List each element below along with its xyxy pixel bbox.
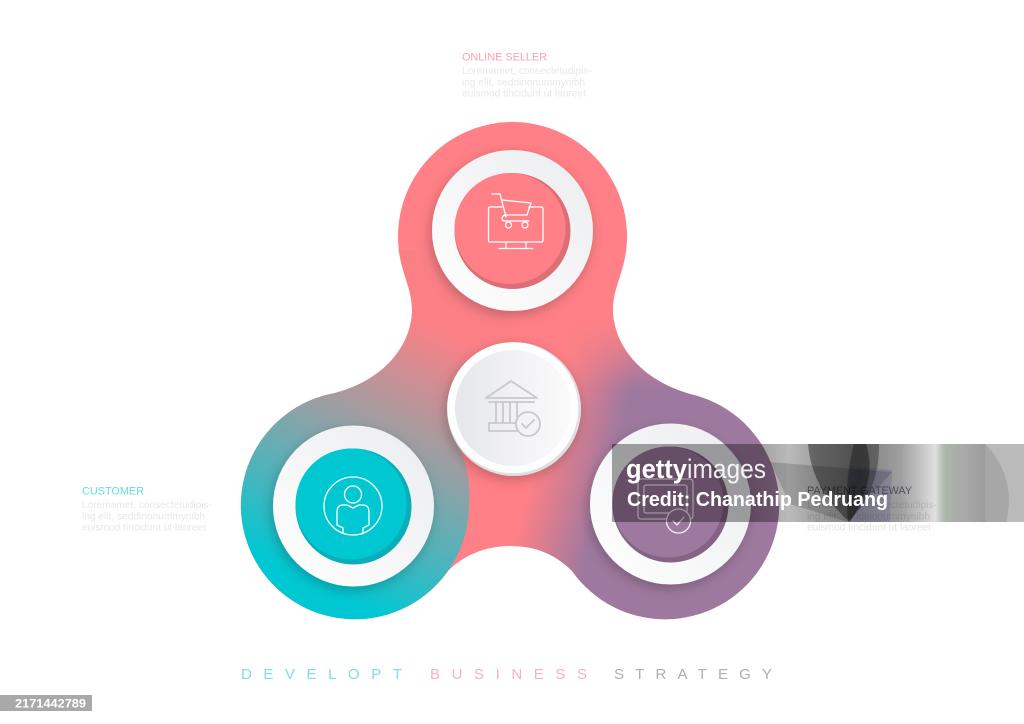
label: customer bbox=[82, 486, 212, 534]
inner disc bbox=[455, 350, 571, 466]
inner disc bbox=[454, 173, 570, 289]
image id badge: 2171442789 bbox=[15, 696, 86, 710]
node: payment gateway bbox=[590, 424, 751, 584]
watermark petals bbox=[770, 444, 892, 522]
watermark arc bbox=[985, 444, 1009, 522]
body text: Loremamet, consectetudipis- bbox=[82, 500, 212, 511]
label: online seller bbox=[462, 52, 592, 100]
watermark logo text: getty bbox=[626, 454, 687, 484]
node: center bank bbox=[447, 342, 581, 476]
label: online seller: ONLINE SELLER bbox=[462, 52, 547, 64]
inner disc bbox=[296, 448, 412, 564]
watermark band bbox=[612, 444, 1024, 522]
title bbox=[241, 666, 772, 683]
outer white disc bbox=[447, 342, 581, 476]
body text bbox=[807, 500, 937, 534]
icon: shopping cart on monitor bbox=[488, 194, 543, 248]
body text: ing elit, seddinonummynibh bbox=[807, 512, 930, 522]
body text: euismod tincidunt ut laoreet bbox=[462, 88, 586, 100]
white ring bbox=[590, 424, 751, 584]
node: online seller bbox=[432, 150, 593, 311]
watermark logo text bbox=[626, 454, 766, 484]
image id badge bbox=[0, 695, 92, 711]
three-lobed gradient shape bbox=[230, 110, 792, 630]
label: payment gateway bbox=[807, 485, 937, 534]
body text: Loremamet, consectetudipis- bbox=[462, 66, 592, 77]
label: customer: CUSTOMER bbox=[82, 486, 144, 498]
body text: euismod tincidunt ut laoreet bbox=[807, 522, 931, 534]
watermark credit: Credit: Chanathip Pedruang bbox=[627, 489, 888, 511]
watermark logo text: images bbox=[687, 454, 766, 484]
node: customer bbox=[273, 426, 434, 586]
body text bbox=[82, 500, 212, 534]
body text: ing elit, seddinonummynibh bbox=[82, 512, 205, 522]
icon: bank with check bbox=[486, 381, 540, 436]
label: payment gateway: PAYMENT GATEWAY bbox=[807, 485, 913, 497]
body text: Loremamet, consectetudipis- bbox=[807, 500, 937, 511]
body text bbox=[462, 66, 592, 100]
body text: euismod tincidunt ut laoreet bbox=[82, 522, 206, 534]
icon: person bbox=[324, 477, 382, 535]
inner disc bbox=[612, 446, 728, 562]
title: BUSINESS bbox=[430, 666, 587, 683]
white ring bbox=[273, 426, 434, 586]
white ring bbox=[432, 150, 593, 311]
title: STRATEGY bbox=[614, 666, 772, 683]
title: DEVELOPT bbox=[241, 666, 402, 683]
icon: payment card with check bbox=[638, 479, 693, 533]
body text: ing elit, seddinonummynibh bbox=[462, 78, 585, 88]
